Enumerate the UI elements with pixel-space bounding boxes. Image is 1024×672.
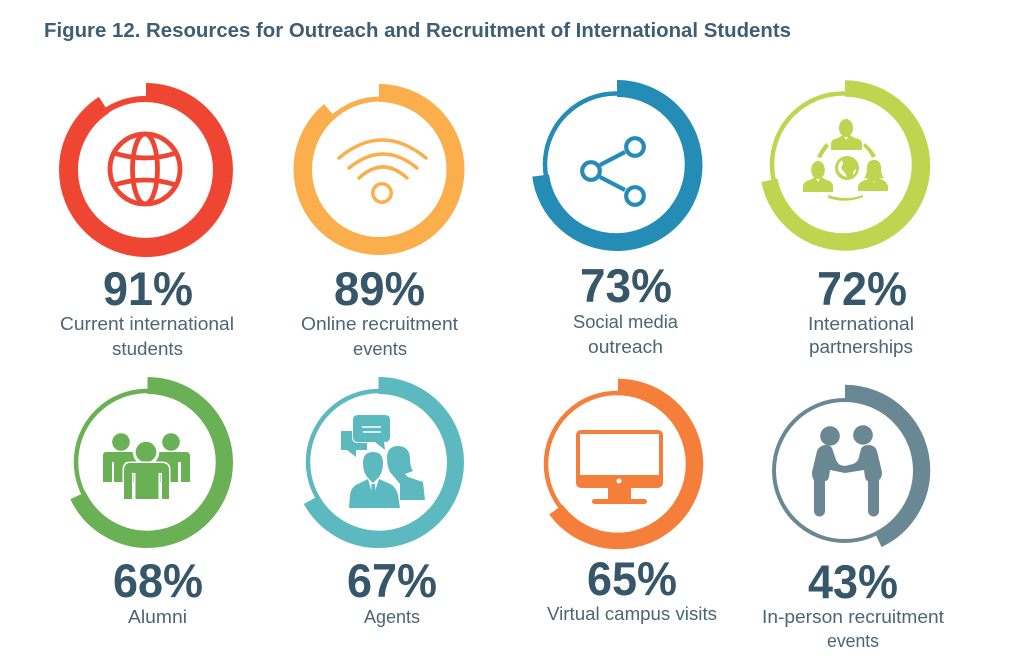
icon: wifi	[339, 140, 426, 202]
panel: social media outreach	[540, 88, 694, 357]
icon: people around globe	[803, 119, 888, 201]
label	[762, 607, 944, 651]
panel: virtual campus visits	[541, 387, 717, 624]
icon: handshake	[812, 425, 882, 516]
label	[301, 314, 458, 359]
label: partnerships	[809, 337, 913, 357]
label	[808, 314, 914, 357]
icon: desktop monitor	[576, 430, 663, 504]
label: outreach	[588, 337, 663, 357]
label: International	[808, 314, 914, 334]
label: Agents	[364, 607, 420, 627]
icon: share	[582, 138, 644, 205]
label: students	[112, 339, 183, 359]
value 72%: 72%	[817, 262, 907, 315]
value 43%: 43%	[808, 555, 898, 608]
value 73%: 73%	[580, 259, 672, 312]
value 68%: 68%	[113, 554, 203, 607]
panel: online recruitment events	[301, 93, 458, 359]
progress ring 68%	[70, 386, 224, 540]
value 89%: 89%	[334, 262, 425, 315]
value 65%: 65%	[587, 552, 677, 605]
value 91%: 91%	[103, 262, 193, 315]
panel: international partnerships	[768, 88, 922, 357]
progress ring 89%	[302, 93, 456, 246]
progress ring 43%	[768, 393, 922, 547]
progress ring 91%	[68, 92, 224, 248]
label: Current international	[60, 314, 234, 334]
panel: agents	[302, 386, 456, 627]
label	[573, 312, 679, 357]
label: Social media	[573, 312, 679, 332]
label	[60, 314, 234, 359]
label: events	[827, 631, 879, 651]
icon: group of people	[103, 433, 190, 499]
value 67%: 67%	[347, 554, 437, 607]
title: Figure 12. Resources for Outreach and Recruitment of International Students	[44, 20, 791, 42]
progress ring 72%	[768, 88, 922, 242]
progress ring 67%	[302, 386, 456, 540]
label: Online recruitment	[301, 314, 458, 334]
progress ring 73%	[540, 88, 694, 242]
label: Virtual campus visits	[547, 604, 717, 624]
progress ring 65%	[541, 387, 695, 541]
panel: in-person recruitment events	[762, 393, 944, 651]
icon: globe	[110, 134, 180, 204]
label: Alumni	[128, 607, 187, 627]
label: events	[353, 339, 407, 359]
label: In-person recruitment	[762, 607, 944, 627]
icon: agents with speech bubbles	[341, 415, 425, 508]
panel: current international students	[60, 92, 234, 359]
panel: alumni	[70, 386, 224, 627]
